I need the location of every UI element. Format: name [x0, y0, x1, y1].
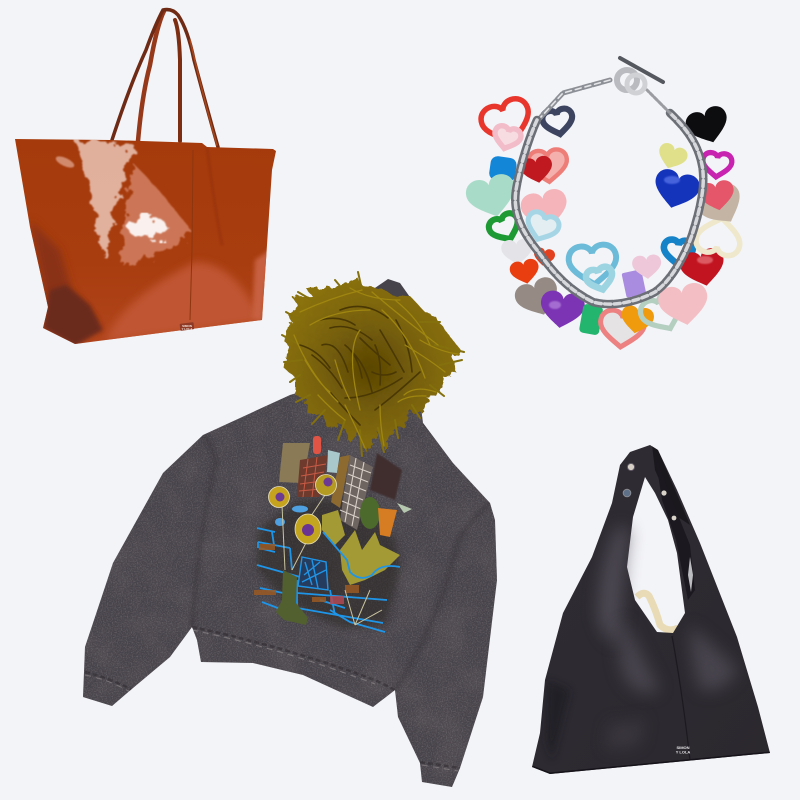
- bag logo: [676, 745, 690, 754]
- heart: large pink: [656, 281, 712, 329]
- heart: blue glass: [584, 265, 616, 293]
- heart: green metallic: [486, 211, 524, 245]
- hood back: [372, 279, 412, 310]
- sweatshirt body: [83, 380, 497, 787]
- silver chain: [515, 80, 703, 304]
- sliver of light in strap gap: [688, 557, 693, 592]
- fur trimmed hood: [282, 272, 464, 456]
- heart: navy metallic: [541, 107, 575, 137]
- print: green boot: [276, 570, 308, 625]
- print: dark ground: [258, 500, 400, 628]
- print: yellow flower left: [268, 486, 290, 508]
- cream inner ribbon: [637, 593, 678, 630]
- bag body: [532, 445, 770, 774]
- tote logo plate: SIMON: [182, 324, 192, 328]
- print: brick fills: [254, 544, 359, 604]
- tote logo plate: Y LOLA: [182, 327, 193, 331]
- heart: pink: [518, 187, 572, 233]
- bag logo: Y LOLA: [676, 750, 690, 754]
- heart: pale yellow: [654, 141, 690, 173]
- tote highlights and folds: [30, 141, 270, 346]
- print: tan building: [279, 443, 310, 483]
- heart: salmon outline lower: [599, 309, 645, 349]
- bag logo: SIMON: [676, 745, 690, 750]
- print: red pill tower: [313, 436, 321, 454]
- heart: white: [501, 238, 533, 266]
- strap snaps: [623, 463, 676, 520]
- heart: small red-orange: [532, 247, 556, 267]
- fur strands light: [294, 288, 458, 448]
- heart: cream outline: [694, 214, 744, 258]
- print: dark shadow building: [370, 453, 402, 500]
- print: green bush: [360, 497, 380, 529]
- leather highlights: [532, 445, 770, 774]
- heart: amber: [619, 304, 655, 336]
- heart: glossy red: [678, 246, 728, 290]
- heart: smoky translucent: [694, 179, 750, 233]
- heart: pale pink: [631, 254, 663, 280]
- toggle clasp: [617, 58, 663, 93]
- print: orange building: [378, 508, 397, 537]
- print: olive foliage: [322, 510, 400, 585]
- heart: rose inner: [697, 179, 737, 213]
- print: red grid building: [297, 455, 328, 497]
- charm: lilac block: [622, 269, 646, 298]
- heart: pale blue glass: [523, 209, 561, 245]
- heart: salmon outline: [527, 149, 569, 183]
- heart: mint: [463, 171, 521, 223]
- product: orange patent leather tote bag: [15, 10, 276, 346]
- print: pale blue tower: [327, 450, 340, 473]
- heart: orange-red: [508, 257, 542, 287]
- print: flower stems: [282, 495, 382, 625]
- heart: royal blue: [650, 166, 702, 214]
- fur strands dark: [300, 306, 420, 425]
- fur mass: [284, 278, 462, 452]
- heart: red outline: [477, 95, 537, 149]
- heart: purple: [538, 289, 586, 331]
- heart: sage outline: [637, 289, 689, 337]
- product: charm necklace with multicoloured hearts: [463, 58, 750, 349]
- heart: sky blue outline: [568, 244, 618, 286]
- print: yellow flower right: [316, 474, 336, 496]
- print: pale cloud: [397, 503, 412, 513]
- print: white grid skyscraper: [340, 455, 373, 530]
- heart: magenta metallic: [701, 152, 733, 178]
- heart: black: [683, 103, 733, 149]
- print: blue scrawl block: [298, 557, 328, 590]
- heart: pink glass: [491, 124, 523, 152]
- print: blue brick lines: [257, 528, 400, 632]
- tote handles: [112, 10, 218, 147]
- back print artwork: [254, 436, 412, 632]
- print: blue blossoms: [275, 506, 308, 526]
- product: washed grey sweatshirt with fur hood: [70, 272, 510, 795]
- print: ochre building: [331, 455, 350, 508]
- heart: cobalt metallic ring: [662, 239, 694, 265]
- heart: deep red: [519, 154, 555, 186]
- fabric wash texture: [83, 394, 497, 786]
- product: black leather hobo bag: [532, 445, 770, 774]
- tote logo plate: [180, 322, 194, 331]
- charm: green block: [579, 303, 603, 336]
- fur edge spikes: [282, 272, 464, 456]
- tote body: [15, 139, 276, 344]
- print: yellow flower centre: [295, 514, 321, 544]
- charm: blue cube: [488, 155, 517, 183]
- heart: taupe: [512, 274, 564, 322]
